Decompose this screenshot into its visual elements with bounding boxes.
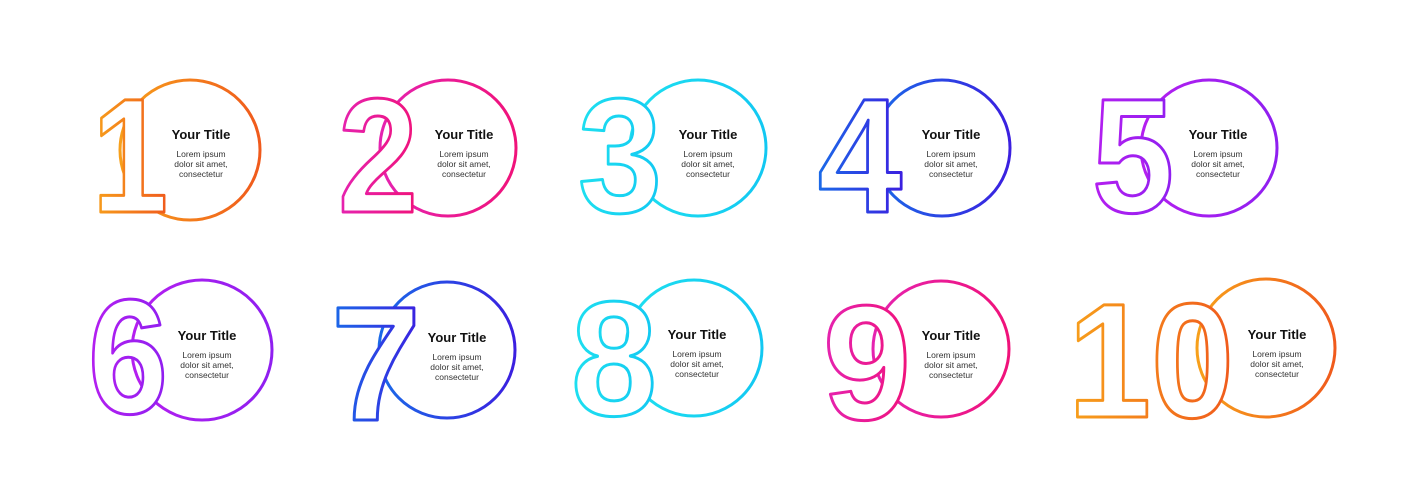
item 4: dolor sit amet, <box>924 159 978 169</box>
item 3 <box>578 64 766 247</box>
item 8: 8 <box>571 267 657 450</box>
item 9: dolor sit amet, <box>924 360 978 370</box>
item 3: Your Title <box>679 127 737 142</box>
item 2: Your Title <box>435 127 493 142</box>
item 2: dolor sit amet, <box>437 159 491 169</box>
item 5: 5 <box>1092 64 1174 247</box>
item 4 <box>818 64 1010 247</box>
item 9: consectetur <box>929 370 973 380</box>
item 10: Your Title <box>1248 327 1306 342</box>
item 6: dolor sit amet, <box>180 360 234 370</box>
item 7 <box>331 272 515 455</box>
item 7: consectetur <box>435 372 479 382</box>
item 1: dolor sit amet, <box>174 159 228 169</box>
item 4: Lorem ipsum <box>926 149 976 159</box>
item 9: Lorem ipsum <box>926 350 976 360</box>
item 7: dolor sit amet, <box>430 362 484 372</box>
item 9: 9 <box>823 271 911 454</box>
item 1: 1 <box>92 64 168 247</box>
item 6 <box>88 265 272 448</box>
item 1: consectetur <box>179 169 223 179</box>
item 6: 6 <box>88 265 168 448</box>
item 5: Lorem ipsum <box>1193 149 1243 159</box>
item 7: Lorem ipsum <box>432 352 482 362</box>
item 2: Lorem ipsum <box>439 149 489 159</box>
item 8: Lorem ipsum <box>672 349 722 359</box>
item 7: Your Title <box>428 330 486 345</box>
item 8: Your Title <box>668 327 726 342</box>
item 8 <box>571 267 762 450</box>
item 5: Your Title <box>1189 127 1247 142</box>
item 10: 10 <box>1068 269 1234 452</box>
item 9 <box>823 271 1009 454</box>
item 5: dolor sit amet, <box>1191 159 1245 169</box>
item 7: 7 <box>331 272 421 455</box>
item 4: 4 <box>818 64 902 247</box>
item 5 <box>1092 64 1277 247</box>
item 3: Lorem ipsum <box>683 149 733 159</box>
item 5: consectetur <box>1196 169 1240 179</box>
item 6: consectetur <box>185 370 229 380</box>
item 1: Your Title <box>172 127 230 142</box>
item 8: dolor sit amet, <box>670 359 724 369</box>
item 3: 3 <box>578 64 662 247</box>
item 2 <box>338 64 516 247</box>
item 6: Your Title <box>178 328 236 343</box>
item 4: consectetur <box>929 169 973 179</box>
item 2: consectetur <box>442 169 486 179</box>
item 10: dolor sit amet, <box>1250 359 1304 369</box>
item 3: dolor sit amet, <box>681 159 735 169</box>
item 10: Lorem ipsum <box>1252 349 1302 359</box>
item 9: Your Title <box>922 328 980 343</box>
item 10 <box>1068 269 1335 452</box>
item 4: Your Title <box>922 127 980 142</box>
item 6: Lorem ipsum <box>182 350 232 360</box>
item 10: consectetur <box>1255 369 1299 379</box>
item 2: 2 <box>338 64 418 247</box>
item 1 <box>92 64 260 247</box>
item 8: consectetur <box>675 369 719 379</box>
item 3: consectetur <box>686 169 730 179</box>
item 1: Lorem ipsum <box>176 149 226 159</box>
